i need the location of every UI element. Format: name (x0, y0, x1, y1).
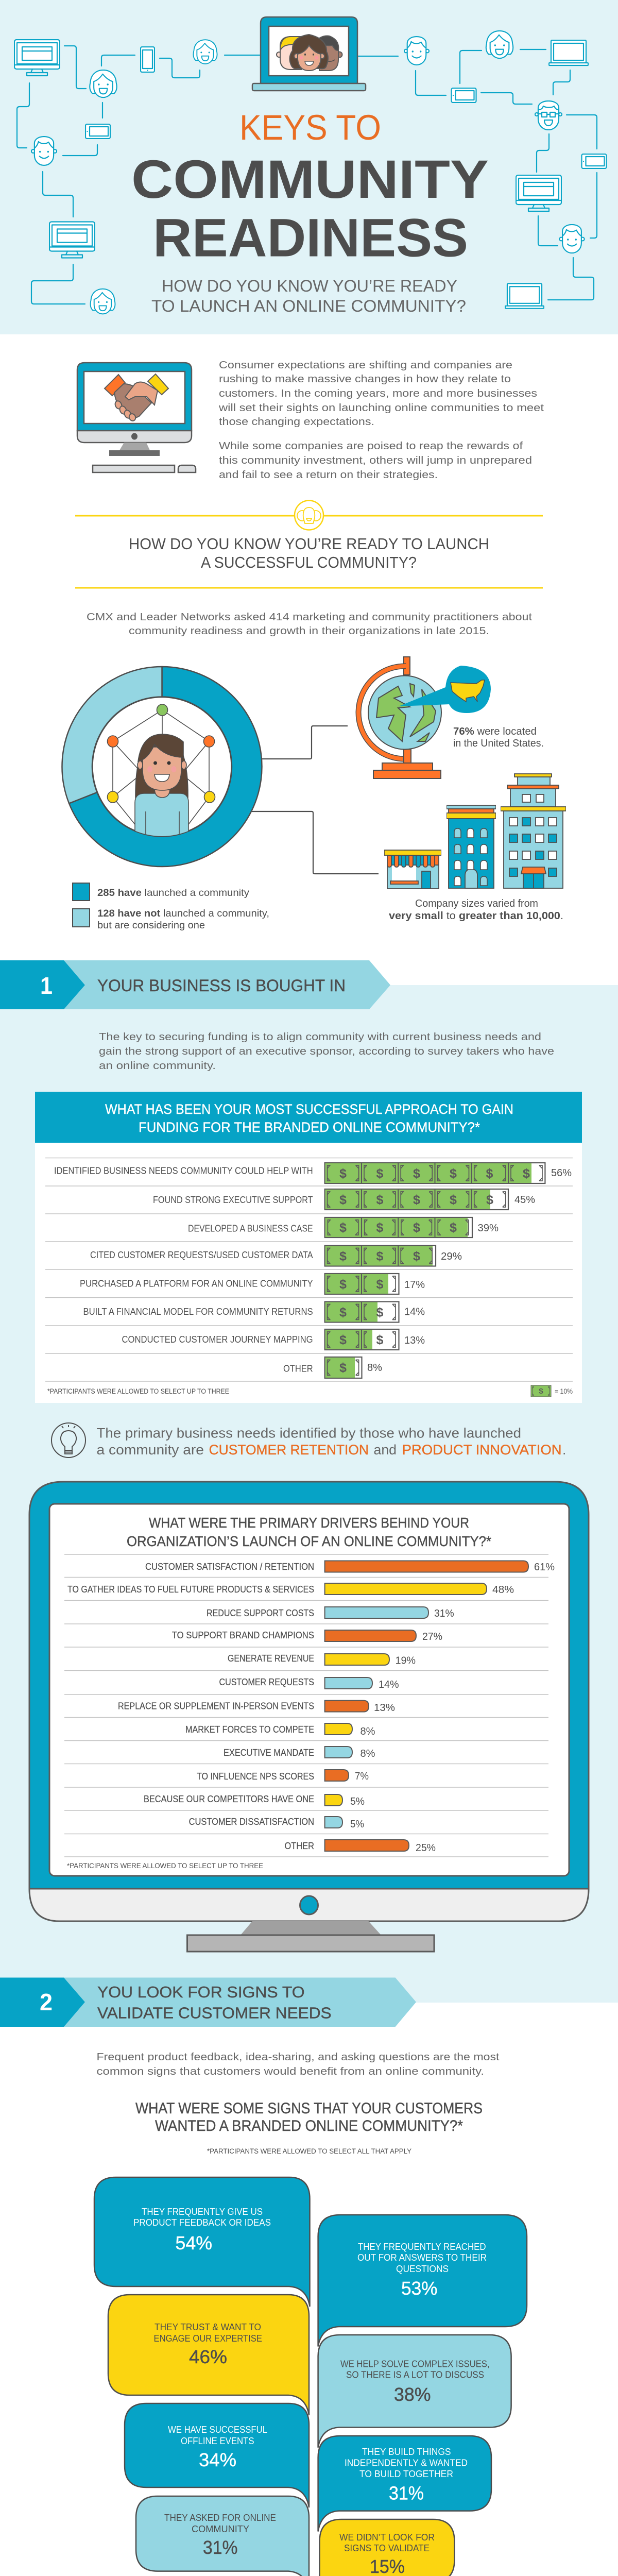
callout: primary business needs: . (562, 1442, 566, 1458)
bar: 56 percent: $ (450, 1166, 457, 1181)
bubble: 38 percent (318, 2335, 511, 2448)
bar: 29 percent: $ (413, 1249, 420, 1263)
row labels: TO SUPPORT BRAND CHAMPIONS (172, 1630, 314, 1640)
bar: 45 percent: 45% (514, 1194, 535, 1206)
icon: laptop with three faces (252, 17, 366, 91)
legend: 285 have launched a community (97, 887, 249, 899)
survey description: community readiness and growth in their organizations in late 2015. (129, 625, 489, 637)
panel: introduction (62, 359, 566, 931)
bar: 39 percent (325, 1217, 499, 1238)
title: COMMUNITY (131, 149, 489, 210)
bar: 17 percent: $ (376, 1277, 384, 1292)
row labels: CONDUCTED CUSTOMER JOURNEY MAPPING (122, 1334, 313, 1345)
icon: tablet (582, 154, 607, 168)
text: funding intro: The key to securing funding is to align community with current business needs and (99, 1031, 541, 1043)
bubble: 31 percent asked (136, 2496, 309, 2576)
chart heading (105, 1101, 513, 1135)
bar values (350, 1561, 555, 1854)
bar: 8 percent: 8% (367, 1362, 382, 1374)
intro text: customers. In the coming years, more and more businesses (219, 387, 537, 399)
bar: 56 percent: $ (523, 1166, 530, 1181)
footnote: *PARTICIPANTS WERE ALLOWED TO SELECT UP TO THREE (47, 1387, 229, 1395)
chart heading: FUNDING FOR THE BRANDED ONLINE COMMUNITY?* (139, 1120, 480, 1135)
text: signs intro: Frequent product feedback, idea-sharing, and asking questions are the most (97, 2051, 500, 2063)
bar: 14 percent: $ (376, 1306, 384, 1320)
section banner 2: VALIDATE CUSTOMER NEEDS (97, 2004, 332, 2022)
bar: 8 percent: $ (339, 1361, 347, 1375)
row labels: OTHER (284, 1841, 314, 1851)
bubble: 31 percent build: INDEPENDENTLY & WANTED (345, 2458, 468, 2468)
icon: man with glasses (535, 101, 562, 130)
bubble: 38 percent: 38% (394, 2384, 431, 2405)
bar: 14 percent: $ (339, 1306, 347, 1320)
section banner 2: 2 (40, 1989, 53, 2015)
bar: 17 percent: 17% (404, 1279, 425, 1291)
bar: 39 percent: $ (376, 1221, 384, 1235)
section banner 2: YOU LOOK FOR SIGNS TO (97, 1983, 305, 2001)
row labels: TO INFLUENCE NPS SCORES (197, 1771, 314, 1782)
intro text: will set their sights on launching online communities to meet (218, 402, 544, 414)
section banner 1 (0, 960, 390, 1009)
heading: signs: WHAT WERE SOME SIGNS THAT YOUR CUSTOMERS (135, 2100, 483, 2117)
icon: man face (31, 137, 57, 165)
section banner 1: 1 (40, 972, 53, 999)
bubble: 15 percent: SIGNS TO VALIDATE (344, 2543, 430, 2553)
callout: primary business needs: PRODUCT INNOVATION (402, 1442, 562, 1458)
row labels: IDENTIFIED BUSINESS NEEDS COMMUNITY COULD HELP WITH (54, 1166, 313, 1176)
legend: but are considering one (97, 920, 205, 931)
stat: 76% in United States: 76% were located (453, 726, 537, 737)
bubble: 15 percent: WE DIDN’T LOOK FOR (339, 2532, 435, 2543)
row labels (54, 1166, 313, 1374)
bar values: 13% (374, 1702, 395, 1714)
row labels: OTHER (283, 1363, 313, 1374)
icon: desktop monitor (14, 40, 60, 76)
footnote: *PARTICIPANTS WERE ALLOWED TO SELECT ALL THAT APPLY (207, 2147, 411, 2155)
panel: funding chart (35, 1092, 582, 1403)
icon: globe (358, 657, 491, 778)
intro text: and fail to see a return on their strategies. (219, 469, 438, 481)
row labels: EXECUTIVE MANDATE (224, 1748, 314, 1758)
bar values: 14% (379, 1679, 399, 1690)
row labels: BUILT A FINANCIAL MODEL FOR COMMUNITY RETURNS (83, 1307, 313, 1317)
bubble: 34 percent (125, 2403, 309, 2507)
bubble: 31 percent asked: COMMUNITY (192, 2524, 249, 2534)
heading (129, 535, 489, 571)
bar values: 5% (350, 1795, 365, 1807)
row labels (67, 1562, 314, 1851)
row labels: REDUCE SUPPORT COSTS (207, 1608, 314, 1618)
heading: A SUCCESSFUL COMMUNITY? (201, 553, 417, 571)
bubble: 54 percent: THEY FREQUENTLY GIVE US (142, 2207, 263, 2217)
monitor body (29, 1482, 589, 1952)
callout: primary business needs: The primary business needs identified by those who have launched (97, 1425, 521, 1440)
icon: man face (559, 225, 585, 253)
icon: laptop (549, 40, 588, 65)
bar: 13 percent: $ (376, 1333, 384, 1347)
connector network (17, 46, 597, 304)
title: KEYS TO (239, 108, 381, 147)
bar values: 48% (492, 1584, 514, 1596)
bar: 39 percent: $ (339, 1221, 347, 1235)
row labels: DEVELOPED A BUSINESS CASE (188, 1223, 313, 1233)
row labels: TO GATHER IDEAS TO FUEL FUTURE PRODUCTS & SERVICES (67, 1584, 314, 1595)
row labels: GENERATE REVENUE (228, 1653, 314, 1664)
callout: primary business needs: and (374, 1442, 397, 1458)
section banner 1: YOUR BUSINESS IS BOUGHT IN (97, 976, 346, 995)
bubble: 38 percent: WE HELP SOLVE COMPLEX ISSUES, (340, 2359, 489, 2369)
bar: 14 percent: 14% (404, 1306, 425, 1318)
row labels: CUSTOMER DISSATISFACTION (189, 1817, 314, 1827)
heading: signs: WANTED A BRANDED ONLINE COMMUNITY?* (155, 2117, 463, 2134)
bar: 39 percent: $ (450, 1221, 457, 1235)
intro text: those changing expectations. (219, 416, 374, 428)
section banner 2 (0, 1977, 416, 2027)
subtitle: TO LAUNCH AN ONLINE COMMUNITY? (151, 297, 466, 315)
icon: handshake (105, 374, 168, 422)
subtitle: HOW DO YOU KNOW YOU’RE READY (162, 277, 457, 295)
chart heading (127, 1515, 491, 1549)
bar: 29 percent: $ (339, 1249, 347, 1263)
icon: light bulb (52, 1423, 85, 1458)
bubble: 54 percent: PRODUCT FEEDBACK OR IDEAS (133, 2217, 271, 2228)
donut chart: launched vs not launched (62, 667, 262, 867)
bubble: 38 percent: SO THERE IS A LOT TO DISCUSS (346, 2370, 484, 2380)
bar: 45 percent: $ (486, 1193, 493, 1207)
heading: HOW DO YOU KNOW YOU’RE READY TO LAUNCH (129, 535, 489, 553)
icon: woman face (193, 40, 217, 64)
row labels: REPLACE OR SUPPLEMENT IN-PERSON EVENTS (118, 1701, 314, 1711)
horizontal bars (325, 1561, 528, 1851)
intro text: Consumer expectations are shifting and companies are (219, 359, 512, 371)
bubble: 15 percent (320, 2519, 454, 2576)
legend: one bill equals ten percent: = 10% (555, 1387, 573, 1395)
intro text: rushing to make massive changes in how they relate to (219, 373, 511, 385)
bar: 17 percent: $ (339, 1277, 347, 1292)
row labels: BECAUSE OUR COMPETITORS HAVE ONE (144, 1794, 314, 1804)
intro text: this community investment, others will jump in unprepared (219, 454, 532, 466)
bubble: 31 percent asked: 31% (203, 2537, 238, 2558)
survey description (87, 611, 532, 637)
icon: tablet (85, 124, 110, 139)
bar: 45 percent: $ (450, 1193, 457, 1207)
icon: tablet (451, 88, 476, 103)
intro text (218, 359, 544, 481)
row separators (64, 1554, 548, 1857)
survey description: CMX and Leader Networks asked 414 marketing and community practitioners about (87, 611, 532, 623)
row labels: CUSTOMER REQUESTS (219, 1677, 314, 1687)
footnote: *PARTICIPANTS WERE ALLOWED TO SELECT UP TO THREE (67, 1861, 263, 1870)
bar values: 8% (360, 1725, 375, 1737)
bar values: 25% (416, 1842, 436, 1854)
icon: laptop (505, 283, 544, 309)
callout: primary business needs: CUSTOMER RETENTION (209, 1442, 369, 1458)
stat: company sizes: very small to greater than 10,000 . (389, 910, 563, 922)
bar: 56 percent: $ (376, 1166, 384, 1181)
icon: woman face (90, 289, 115, 314)
bar values: 19% (396, 1655, 416, 1666)
row labels: CUSTOMER SATISFACTION / RETENTION (145, 1562, 314, 1572)
legend: 128 have not launched a community, (97, 908, 269, 919)
bubble: 53 percent: QUESTIONS (396, 2264, 449, 2274)
text: funding intro: an online community. (99, 1060, 216, 1072)
bar: 29 percent: 29% (441, 1250, 462, 1262)
bubble: 31 percent build: TO BUILD TOGETHER (359, 2469, 453, 2479)
bar: 29 percent: $ (376, 1249, 384, 1263)
bar: 13 percent: $ (339, 1333, 347, 1347)
bar: 8 percent (325, 1357, 382, 1378)
bar: 56 percent (325, 1163, 572, 1183)
bubble: 46 percent (108, 2295, 309, 2415)
bar: 13 percent (325, 1329, 425, 1350)
illustration: woman in network (107, 704, 215, 845)
panel: monitor with drivers chart (29, 1482, 589, 1952)
panel: hero (14, 17, 607, 315)
bar values: 5% (350, 1818, 364, 1830)
bar: 45 percent: $ (376, 1193, 384, 1207)
bar: 14 percent (325, 1301, 425, 1322)
icon: computer with handshake (77, 363, 196, 472)
bubble: 34 percent: OFFLINE EVENTS (181, 2436, 254, 2446)
bar: 13 percent: 13% (404, 1334, 425, 1346)
chart heading: ORGANIZATION’S LAUNCH OF AN ONLINE COMMUNITY?* (127, 1533, 491, 1549)
bubble: 31 percent asked: THEY ASKED FOR ONLINE (164, 2513, 276, 2523)
bar: 17 percent (325, 1274, 425, 1294)
text: signs intro (97, 2051, 500, 2077)
icon: man face (404, 37, 429, 65)
stat: company sizes: Company sizes varied from (415, 898, 538, 909)
icon: woman face (486, 31, 513, 58)
legend (73, 883, 269, 931)
bubble: 34 percent: 34% (199, 2449, 236, 2470)
text: funding intro: gain the strong support of an executive sponsor, according to survey takers who have (99, 1045, 554, 1057)
intro text: While some companies are poised to reap the rewards of (219, 440, 523, 452)
bar: 45 percent: $ (413, 1193, 420, 1207)
chart heading: WHAT HAS BEEN YOUR MOST SUCCESSFUL APPROACH TO GAIN (105, 1101, 513, 1117)
panel: speech bubbles (94, 2177, 527, 2576)
text: signs intro: common signs that customers would benefit from an online community. (97, 2065, 484, 2077)
bar: 39 percent: $ (413, 1221, 420, 1235)
bar: 56 percent: 56% (551, 1167, 572, 1179)
stat: company sizes (389, 898, 563, 922)
bubble: 31 percent build: 31% (389, 2483, 424, 2504)
bubble: 34 percent: WE HAVE SUCCESSFUL (168, 2425, 267, 2435)
stat: 76% in United States: in the United States. (453, 738, 544, 749)
stat: 76% in United States (453, 726, 544, 749)
icon: desktop monitor (516, 175, 561, 211)
row separators (45, 1158, 573, 1381)
bar: 56 percent: $ (413, 1166, 420, 1181)
heading: signs (135, 2100, 483, 2134)
title: READINESS (153, 208, 468, 268)
bar values: 27% (422, 1631, 442, 1642)
callout: primary business needs: a community are (97, 1442, 204, 1458)
bar values: 8% (360, 1748, 375, 1759)
bubble: 46 percent: 46% (189, 2346, 227, 2367)
bar: 29 percent (325, 1246, 462, 1266)
title (131, 108, 489, 268)
icon: woman face (90, 70, 117, 97)
bar values: 61% (534, 1561, 555, 1573)
bubble: 54 percent (94, 2177, 310, 2307)
bubble: 54 percent: 54% (175, 2232, 212, 2253)
legend: one bill equals ten percent (531, 1385, 573, 1397)
divider with community badge (75, 501, 543, 530)
bubble: 31 percent build: THEY BUILD THINGS (362, 2447, 451, 2457)
text: funding intro (99, 1031, 554, 1072)
bar: 56 percent: $ (486, 1166, 493, 1181)
legend: one bill equals ten percent: $ (539, 1387, 543, 1396)
icon: phone (141, 47, 154, 72)
bar: 56 percent: $ (339, 1166, 347, 1181)
bar: 45 percent (325, 1189, 535, 1210)
bubble: 53 percent: OUT FOR ANSWERS TO THEIR (357, 2252, 487, 2263)
bar: 39 percent: 39% (478, 1222, 499, 1234)
bar: 45 percent: $ (339, 1193, 347, 1207)
row labels: MARKET FORCES TO COMPETE (185, 1724, 314, 1735)
bar values: 31% (434, 1607, 454, 1619)
row labels: CITED CUSTOMER REQUESTS/USED CUSTOMER DATA (90, 1250, 313, 1260)
bubble: 46 percent: ENGAGE OUR EXPERTISE (153, 2333, 262, 2344)
illustration: company buildings (384, 774, 566, 889)
row labels: PURCHASED A PLATFORM FOR AN ONLINE COMMUNITY (80, 1279, 313, 1289)
bar values: 7% (355, 1770, 369, 1782)
bubble: 53 percent: 53% (401, 2278, 438, 2299)
icon: desktop monitor (49, 222, 95, 258)
callout: primary business needs (52, 1423, 566, 1458)
bubble: 31 percent build (318, 2436, 491, 2532)
row labels: FOUND STRONG EXECUTIVE SUPPORT (153, 1195, 313, 1205)
bubble: 53 percent (318, 2215, 527, 2346)
chart heading: WHAT WERE THE PRIMARY DRIVERS BEHIND YOUR (149, 1515, 469, 1531)
bubble: 53 percent: THEY FREQUENTLY REACHED (358, 2242, 486, 2252)
bubble: 46 percent: THEY TRUST & WANT TO (154, 2322, 261, 2332)
subtitle (151, 277, 466, 315)
connector lines (251, 726, 379, 874)
